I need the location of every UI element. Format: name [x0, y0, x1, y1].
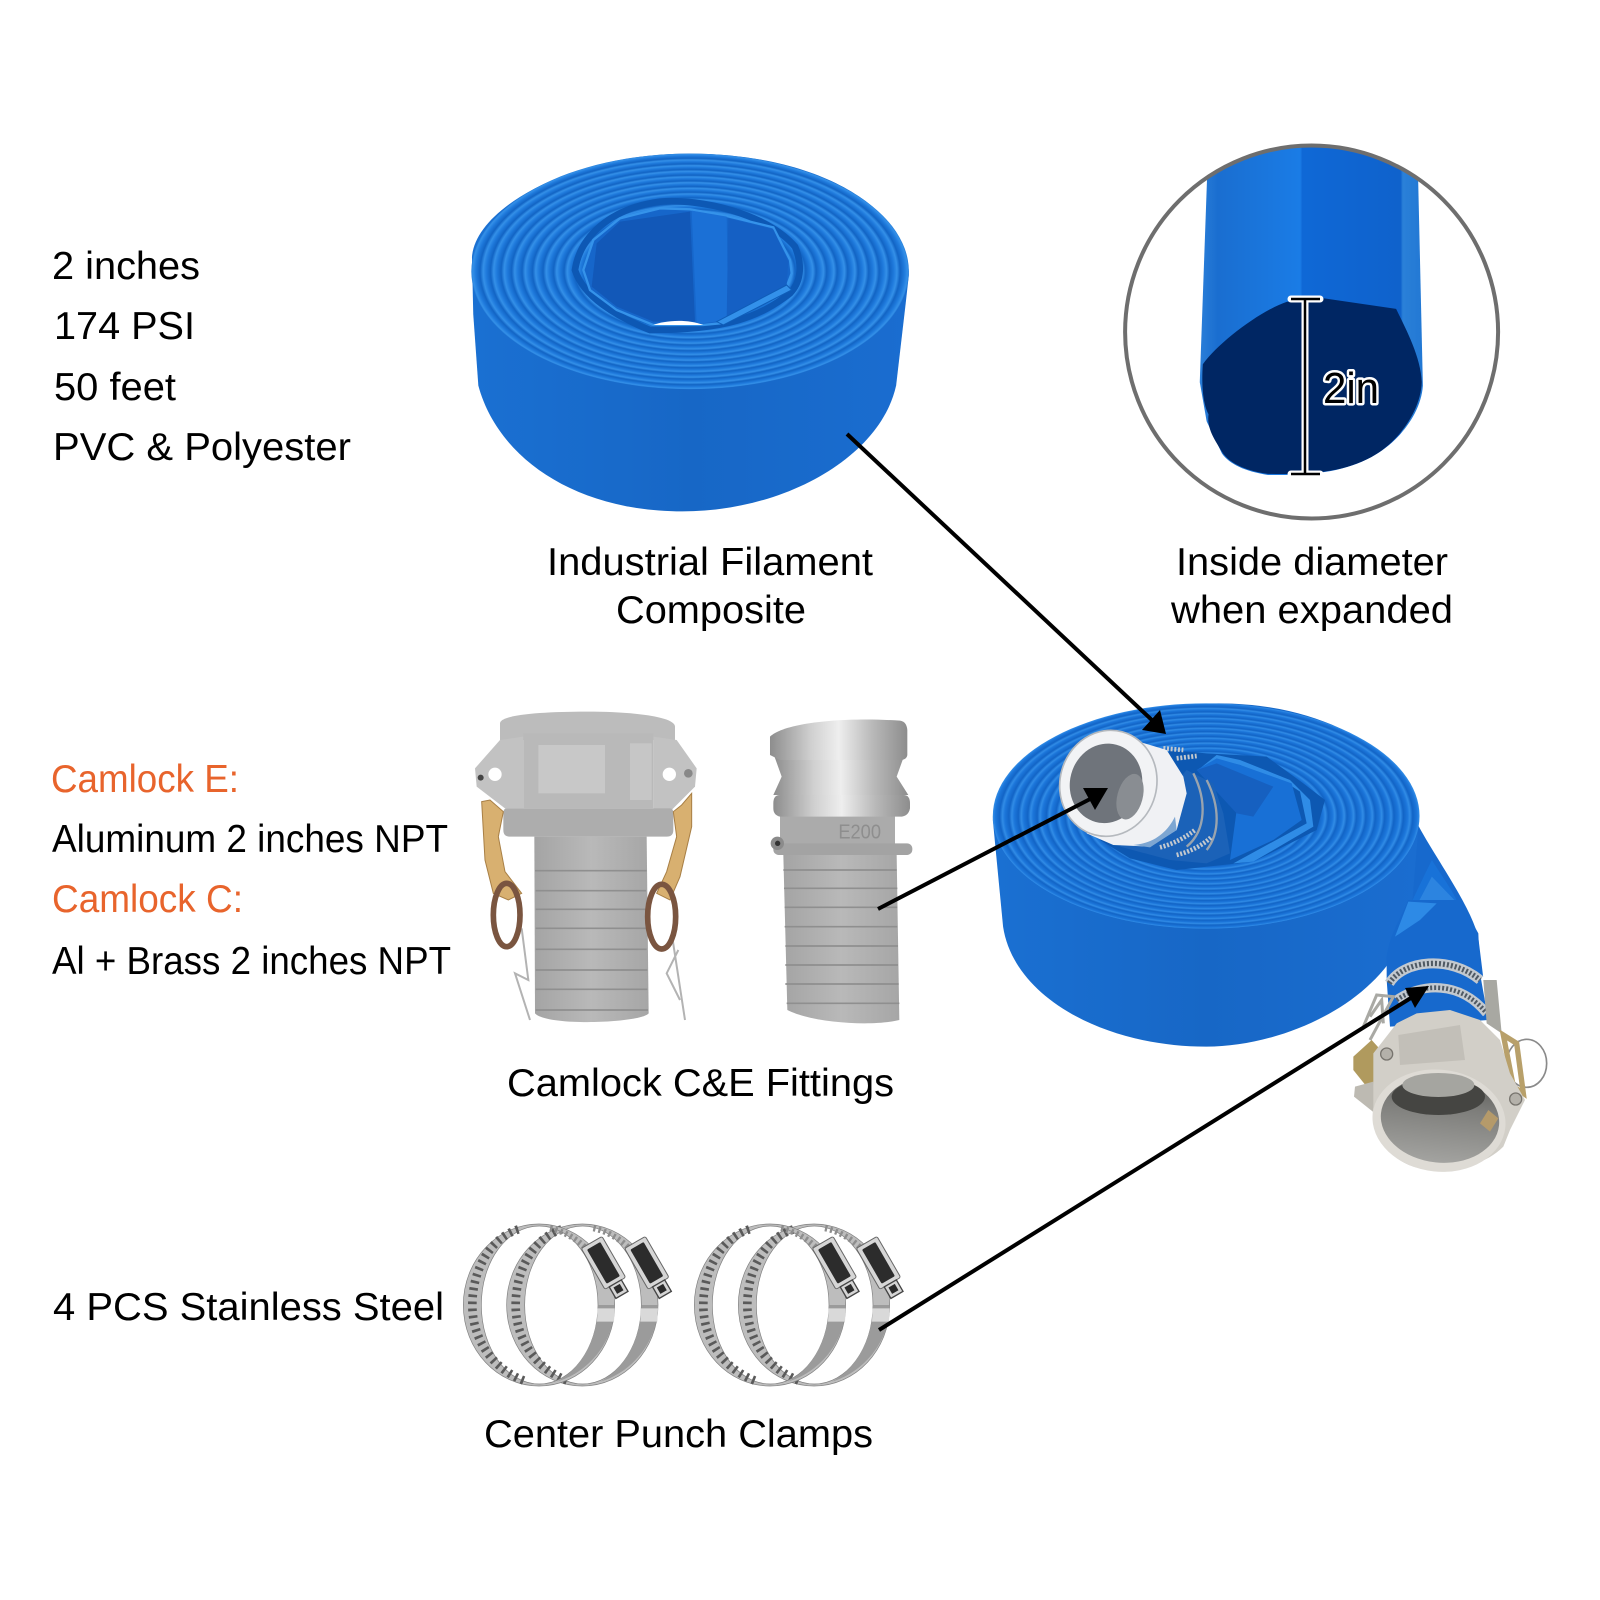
- dimension marker: [1291, 299, 1320, 474]
- roll centre opening: [575, 201, 800, 330]
- specifications text block: PVC & Polyester: [53, 426, 351, 469]
- text: stainless steel: 4 PCS Stainless Steel: [53, 1286, 444, 1329]
- infographic canvas: [52, 144, 1548, 1455]
- coil centre opening and camlock E end: [1048, 719, 1325, 870]
- caption: industrial filament composite: Composite: [616, 589, 806, 632]
- arrow: composite to coil: [847, 434, 1166, 734]
- caption: camlock fittings: Camlock C&E Fittings: [507, 1062, 894, 1105]
- caption: inside diameter: when expanded: [1170, 589, 1453, 632]
- caption: clamps: Center Punch Clamps: [484, 1413, 873, 1456]
- clamps photo: 4 stainless steel: [463, 1224, 907, 1386]
- camlock text block: Camlock E:: [51, 758, 239, 801]
- hose lower section and camlock C end: [1353, 900, 1547, 1178]
- camlock text block: Aluminum 2 inches NPT: [52, 818, 448, 861]
- dimension label: 2in: [1323, 364, 1379, 413]
- caption: inside diameter: Inside diameter: [1176, 541, 1448, 584]
- assembled hose with fittings: [993, 703, 1547, 1178]
- specifications text block: [52, 245, 351, 469]
- specifications text block: 50 feet: [54, 366, 176, 409]
- camlock text block: Al + Brass 2 inches NPT: [52, 940, 451, 983]
- specifications text block: 174 PSI: [54, 305, 195, 348]
- caption: industrial filament composite: [547, 541, 873, 632]
- hose cross-section: [1200, 136, 1423, 475]
- arrow: clamps to hose band: [879, 986, 1429, 1330]
- circle outline: [1125, 146, 1498, 518]
- camlock C fitting: [475, 712, 697, 1022]
- camlock text block: [51, 758, 451, 983]
- camlock E fitting: [770, 720, 912, 1023]
- caption: inside diameter: [1170, 541, 1453, 632]
- arrow: fittings to hose end: [878, 788, 1108, 909]
- specifications text block: 2 inches: [52, 245, 200, 288]
- circular detail: inside diameter: [1125, 136, 1498, 518]
- engraved model mark: E200: [838, 820, 881, 843]
- camlock text block: Camlock C:: [52, 878, 243, 921]
- hose roll photo: [471, 154, 909, 511]
- caption: industrial filament composite: Industrial Filament: [547, 541, 873, 584]
- hose tail and coil: [993, 703, 1483, 1047]
